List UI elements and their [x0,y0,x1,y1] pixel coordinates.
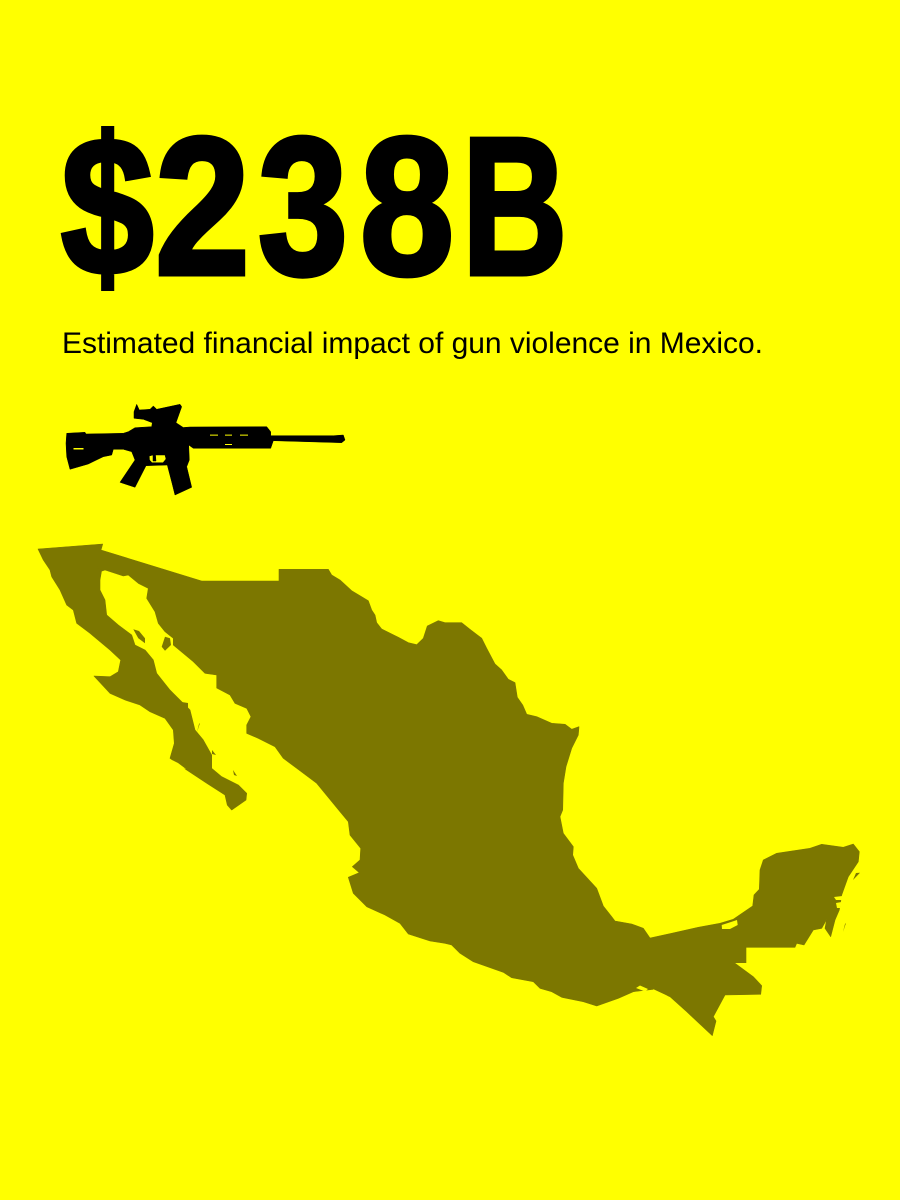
text block: description: Estimated financial impact of gun violence in Mexico. [62,327,763,360]
title: headline figure: B [462,97,567,316]
map: lagoons [172,760,842,996]
title: headline figure: 3 [258,97,348,316]
title: headline figure [60,97,567,316]
map: islands [133,629,860,932]
icon: assault rifle silhouette [66,404,346,496]
title: headline figure: $ [61,97,154,316]
title: headline figure: 2 [155,97,250,316]
title: headline figure: 8 [360,97,454,316]
